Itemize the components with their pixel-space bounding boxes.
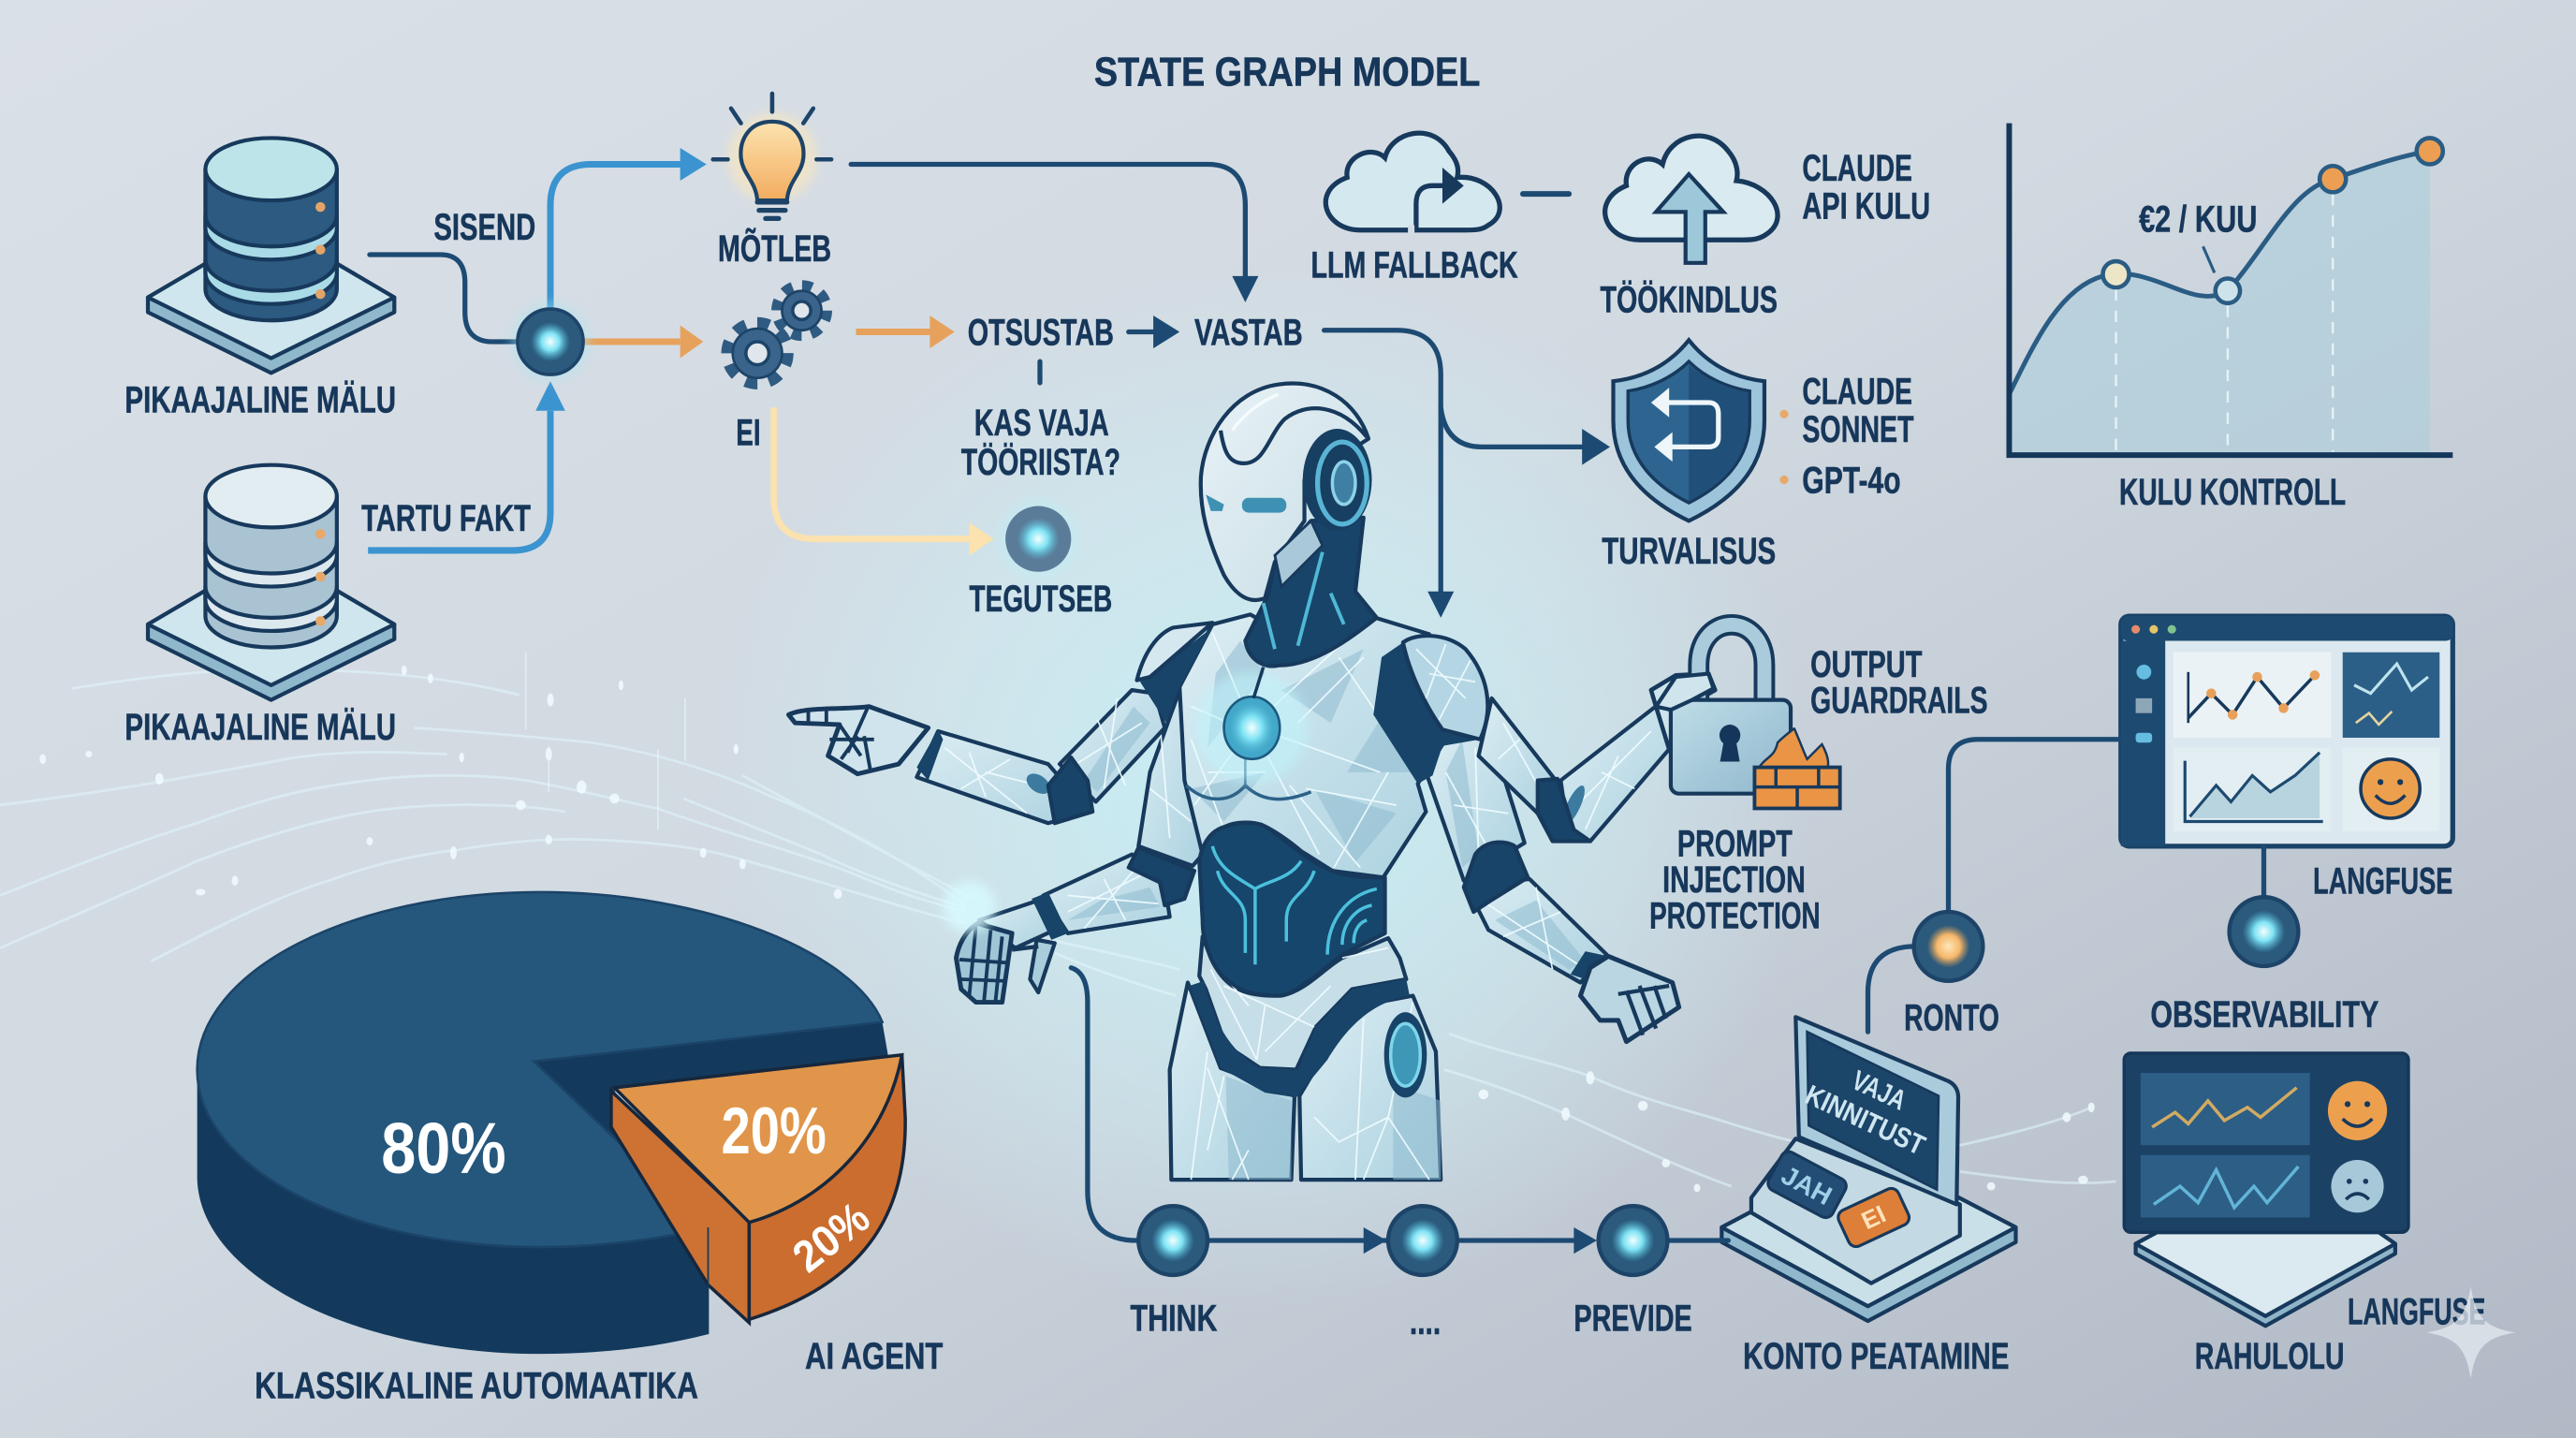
sparkle watermark	[2426, 1286, 2515, 1378]
robot arm: raised right hand	[1479, 674, 1715, 842]
icon: reliability cloud	[1605, 136, 1778, 263]
label: need a tool: TÖÖRIISTA?	[961, 442, 1120, 483]
connector: dashboard to observability node	[2262, 846, 2265, 899]
panel: Langfuse dashboard	[2121, 616, 2452, 846]
hand glow	[943, 881, 996, 933]
robot abdomen core	[1199, 823, 1385, 996]
label: 80 percent: 80%	[381, 1108, 506, 1189]
screen message: KINNITUST	[1800, 1079, 1929, 1162]
label: long-term memory 2: PIKAAJALINE MÄLU	[124, 707, 396, 748]
label: Ronto: RONTO	[1904, 997, 1999, 1038]
arrow: hub to thinking	[550, 148, 707, 312]
wave sparkles	[39, 653, 2095, 1192]
icon: security shield	[1613, 340, 1764, 521]
node: ellipsis	[1388, 1206, 1457, 1275]
robot pelvis and legs	[1170, 936, 1441, 1180]
arrow: hub to gears	[583, 325, 703, 359]
label: observability: OBSERVABILITY	[2150, 994, 2378, 1035]
label: prompt injection protection: INJECTION	[1662, 859, 1806, 901]
arrow: gears to decides	[856, 315, 955, 348]
node: central hub	[511, 302, 590, 381]
flowing light waves	[0, 669, 2116, 1186]
robot halo glow	[707, 263, 1823, 1314]
icon: approval terminal	[1721, 1017, 2015, 1321]
robot arm: lower right	[1426, 723, 1679, 1042]
label: Claude Sonnet	[1779, 372, 1914, 450]
label: thinks: MÕTLEB	[718, 228, 831, 270]
arrow: answer to robot	[1325, 330, 1454, 618]
label: input: SISEND	[433, 207, 535, 248]
label: account stop: KONTO PEATAMINE	[1743, 1336, 2009, 1377]
label: prompt injection protection: PROTECTION	[1649, 896, 1821, 937]
label: 20 percent side: 20%	[783, 1193, 879, 1283]
robot chest orb	[1196, 668, 1308, 784]
label: GPT-4o: GPT-4o	[1802, 461, 1901, 502]
label: acts: TEGUTSEB	[970, 579, 1112, 620]
label: output guardrails	[1810, 644, 1988, 722]
icon: gears	[728, 286, 827, 383]
label: Tartu fakt: TARTU FAKT	[361, 498, 531, 539]
screen message	[1800, 1049, 1943, 1162]
label: long-term memory 1: PIKAAJALINE MÄLU	[124, 380, 396, 421]
label: satisfaction: RAHULOLU	[2195, 1336, 2344, 1377]
label: GPT-4o	[1779, 461, 1901, 502]
label: output guardrails: OUTPUT	[1810, 644, 1922, 685]
label: Langfuse top: LANGFUSE	[2313, 861, 2452, 902]
label: 20 percent top: 20%	[722, 1093, 827, 1167]
icon: approval terminal: JAH	[1777, 1160, 1837, 1211]
node: acts	[999, 500, 1077, 579]
label: dots: ....	[1410, 1301, 1441, 1343]
arrow: decides to answers	[1129, 315, 1179, 348]
label: Claude API cost: CLAUDE	[1802, 148, 1912, 189]
label: AI agent: AI AGENT	[805, 1336, 943, 1377]
icon: long-term memory database 1	[148, 138, 394, 373]
label: Claude API cost	[1802, 148, 1930, 227]
chart: 80/20 pie	[198, 892, 905, 1354]
robot arm: lower left	[956, 690, 1203, 1003]
label: previde: PREVIDE	[1573, 1299, 1692, 1340]
icon: LLM fallback cloud	[1325, 133, 1500, 235]
arrow: no to acts	[774, 407, 994, 555]
connector: think flow line	[1071, 968, 1728, 1254]
label: prompt injection protection: PROMPT	[1677, 823, 1793, 864]
node: observability	[2230, 897, 2298, 966]
label: decides: OTSUSTAB	[968, 313, 1114, 354]
label: Claude API cost: API KULU	[1802, 185, 1930, 227]
label: need a tool	[961, 403, 1120, 483]
icon: approval terminal: EI	[1857, 1199, 1890, 1235]
label: need a tool: KAS VAJA	[974, 403, 1109, 444]
node: Ronto	[1868, 912, 1983, 1032]
label: think: THINK	[1131, 1299, 1218, 1340]
label: 2 euros per month: €2 / KUU	[2139, 198, 2257, 240]
label: security: TURVALISUS	[1602, 531, 1776, 572]
node: previde	[1599, 1206, 1667, 1275]
label: Langfuse bottom: LANGFUSE	[2348, 1292, 2485, 1333]
label: prompt injection protection	[1649, 823, 1821, 937]
robot torso	[1137, 614, 1487, 877]
label: LLM fallback: LLM FALLBACK	[1311, 245, 1518, 286]
chart: cost control	[2009, 124, 2452, 455]
label: classic automation: KLASSIKALINE AUTOMAATIKA	[255, 1366, 698, 1407]
arrow: thinking to answer	[851, 165, 1258, 302]
icon: long-term memory database 2	[148, 465, 394, 700]
arrow: fact line to hub	[368, 381, 565, 550]
label: Claude Sonnet: CLAUDE	[1802, 372, 1912, 413]
robot arm: pointing hand	[788, 690, 1164, 823]
robot figure	[788, 384, 1715, 1180]
label: output guardrails: GUARDRAILS	[1810, 681, 1988, 722]
screen message: VAJA	[1847, 1065, 1910, 1117]
label: reliability: TÖÖKINDLUS	[1600, 279, 1778, 320]
label: cost control: KULU KONTROLL	[2119, 472, 2346, 513]
label: no: EI	[736, 413, 761, 454]
arrow: input line to hub	[370, 255, 522, 342]
title: STATE GRAPH MODEL	[1094, 49, 1480, 95]
arrow: branch to shield	[1441, 407, 1610, 465]
panel: satisfaction dashboard	[2124, 1053, 2408, 1326]
label: Claude Sonnet: SONNET	[1802, 409, 1914, 450]
robot head	[1201, 384, 1377, 667]
label: answers: VASTAB	[1194, 313, 1303, 354]
connector: dashboard to node	[1949, 740, 2121, 914]
icon: light bulb	[713, 94, 831, 218]
node: think	[1138, 1206, 1208, 1275]
icon: padlock with firewall	[1656, 624, 1840, 808]
